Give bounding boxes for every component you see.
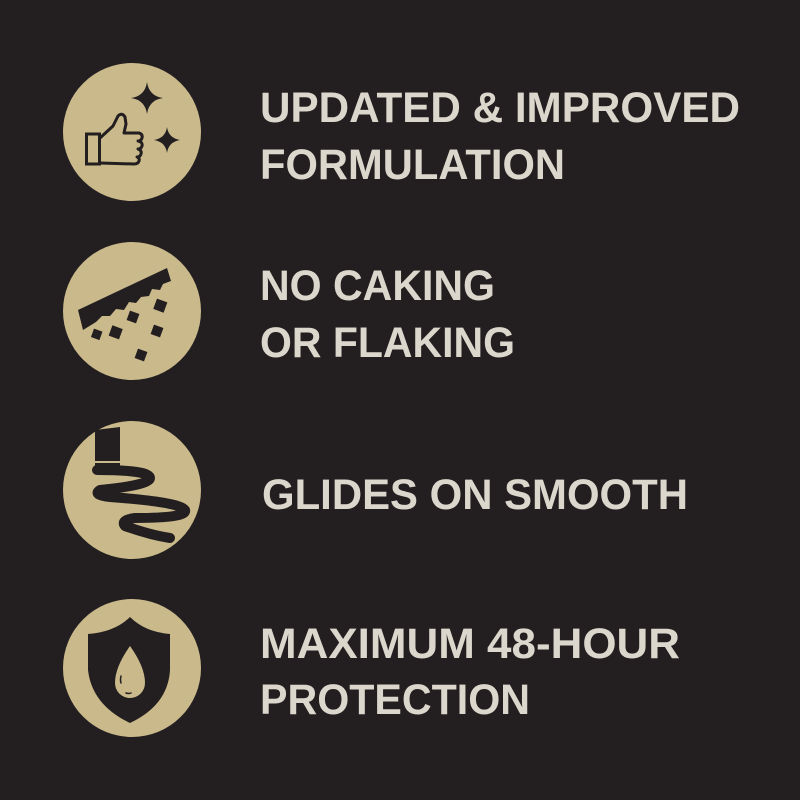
text: no caking or flaking: OR FLAKING bbox=[260, 319, 515, 367]
text: maximum 48-hour protection bbox=[260, 620, 680, 724]
text: no caking or flaking: NO CAKING bbox=[260, 262, 495, 310]
text: updated & improved formulation: FORMULATION bbox=[260, 141, 565, 189]
icon: lipstick glide stroke bbox=[63, 421, 201, 559]
text: glides on smooth: GLIDES ON SMOOTH bbox=[262, 471, 688, 519]
text: maximum 48-hour protection: MAXIMUM 48-HOUR bbox=[260, 620, 680, 668]
text: updated & improved formulation: UPDATED & IMPROVED bbox=[260, 84, 740, 132]
icon: no caking flakes bbox=[63, 242, 201, 380]
icon: shield with drop bbox=[63, 599, 201, 737]
text: no caking or flaking bbox=[260, 262, 515, 367]
text: updated & improved formulation bbox=[260, 84, 740, 189]
icon: thumbs up with sparkles bbox=[63, 63, 201, 201]
text: maximum 48-hour protection: PROTECTION bbox=[260, 676, 530, 724]
